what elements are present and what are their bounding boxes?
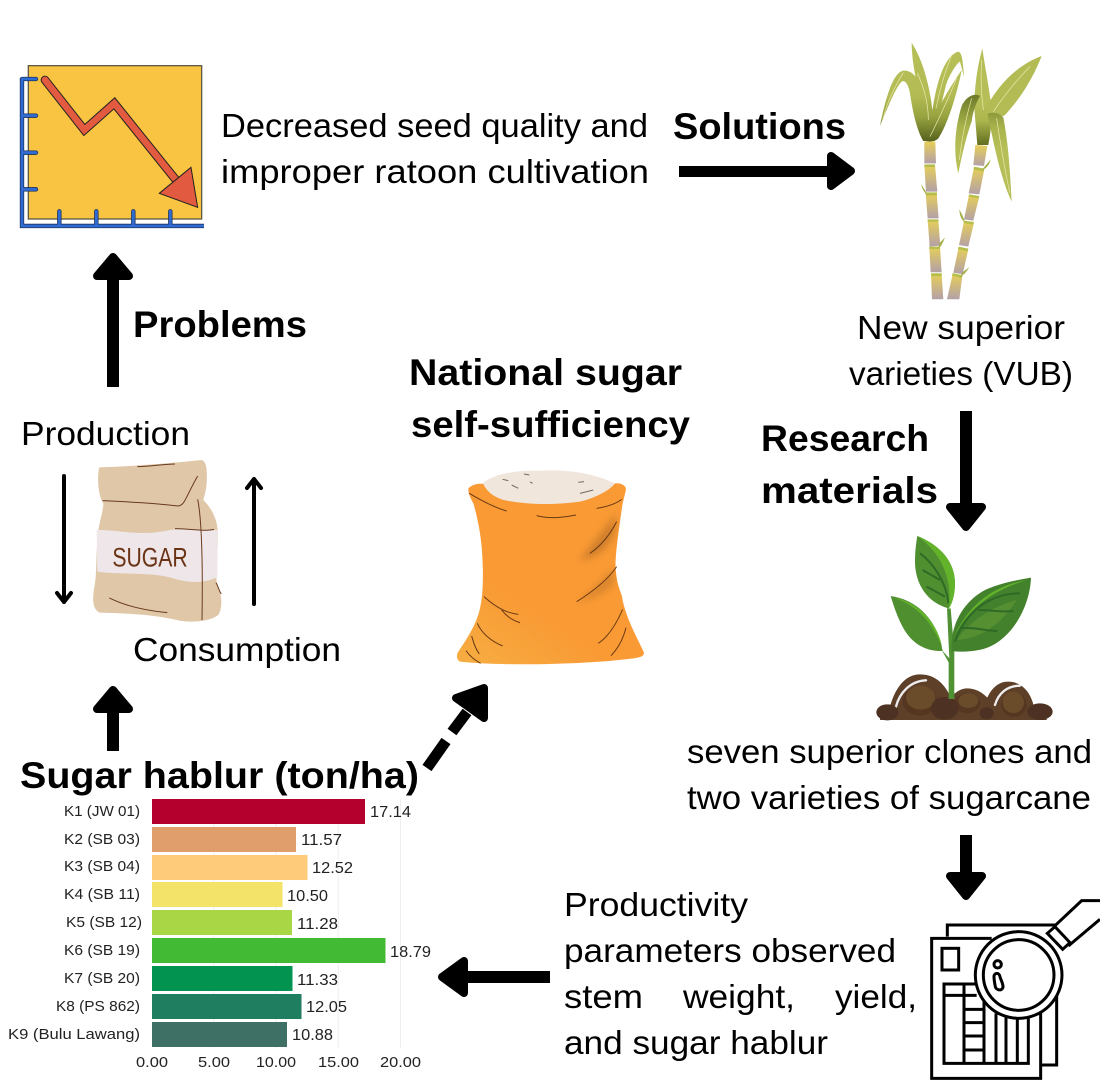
arrow: solutions to cane [679, 156, 851, 186]
bar K9: 10.88 [292, 1027, 333, 1044]
text: decreased seed quality: improper ratoon cultivation [221, 153, 649, 190]
heading: solutions: Solutions [673, 106, 846, 147]
bar K1: K1 (JW 01) [64, 803, 140, 820]
arrow: parameters to chart [442, 961, 550, 993]
heading: national sugar self-sufficiency: self-sufficiency [411, 404, 690, 445]
heading: research materials [761, 418, 938, 511]
heading: national sugar self-sufficiency [409, 352, 690, 445]
icon: declining chart [22, 66, 204, 226]
text: consumption: Consumption [133, 631, 341, 668]
x axis labels: 20.00 [380, 1054, 421, 1071]
bar K1: 17.14 [370, 804, 411, 821]
icon: sugarcane [880, 43, 1042, 299]
bar K5 [66, 910, 338, 935]
bar K9: K9 (Bulu Lawang) [8, 1026, 140, 1043]
bar K4 [64, 882, 328, 907]
bar K9 [8, 1022, 333, 1047]
bar K6 [64, 938, 431, 963]
bar K5: 11.28 [297, 916, 338, 933]
bar K5: K5 (SB 12) [66, 914, 142, 931]
text: productivity parameters: and sugar hablur [564, 1024, 828, 1061]
x axis labels: 15.00 [318, 1054, 359, 1071]
text: new superior varieties [849, 309, 1073, 392]
x axis labels [136, 1054, 421, 1071]
bar K3 [64, 855, 353, 880]
text: productivity parameters: parameters observed [564, 932, 896, 969]
icon: document with magnifier [932, 901, 1100, 1078]
arrow: research materials down [950, 411, 982, 527]
text: production: Production [21, 415, 190, 452]
bar K8 [56, 994, 347, 1019]
arrow: problems up [97, 257, 129, 387]
heading: sugar hablur: Sugar hablur (ton/ha) [20, 755, 419, 796]
text: productivity parameters: stem [564, 978, 643, 1015]
text: productivity parameters: yield, [835, 978, 917, 1015]
bar K4: 10.50 [287, 888, 328, 905]
icon: sugar bag: SUGAR [112, 543, 188, 573]
text: seven superior clones: two varieties of sugarcane [687, 779, 1091, 816]
bar K1 [64, 799, 411, 824]
bar K2: 11.57 [301, 832, 342, 849]
arrow: consumption up [247, 479, 261, 604]
bar K2: K2 (SB 03) [64, 831, 140, 848]
bar K8: K8 (PS 862) [56, 998, 140, 1015]
bar K6: K6 (SB 19) [64, 942, 140, 959]
bar K2 [64, 827, 342, 852]
bar K3: 12.52 [312, 860, 353, 877]
heading: research materials: Research [761, 418, 929, 459]
bar K7 [64, 966, 338, 991]
icon: sugar bag [93, 460, 221, 622]
text: productivity parameters: weight, [682, 978, 795, 1015]
bar chart: sugar hablur [8, 799, 431, 1071]
text: seven superior clones [687, 733, 1092, 816]
arrow: dashed to national sugar [427, 688, 484, 768]
text: new superior varieties: New superior [857, 309, 1065, 346]
icon: orange sack [457, 470, 644, 664]
bar K7: 11.33 [297, 972, 338, 989]
bar K3: K3 (SB 04) [64, 858, 140, 875]
heading: research materials: materials [761, 470, 938, 511]
text: productivity parameters [564, 886, 917, 1061]
x axis labels: 5.00 [198, 1054, 230, 1071]
heading: national sugar self-sufficiency: National sugar [409, 352, 682, 393]
bar K6: 18.79 [390, 944, 431, 961]
text: productivity parameters: Productivity [564, 886, 749, 923]
bar K8: 12.05 [306, 999, 347, 1016]
bar K7: K7 (SB 20) [64, 970, 140, 987]
x axis labels: 10.00 [256, 1054, 296, 1071]
arrow: production down [57, 476, 71, 602]
bar K4: K4 (SB 11) [64, 886, 140, 903]
text: decreased seed quality: Decreased seed quality and [221, 107, 648, 144]
x axis labels: 0.00 [136, 1054, 168, 1071]
arrow: clones to parameters [950, 835, 982, 896]
icon: seedling [876, 536, 1053, 720]
text: new superior varieties: varieties (VUB) [849, 355, 1073, 392]
heading: problems: Problems [133, 304, 307, 345]
text: decreased seed quality [221, 107, 649, 190]
text: seven superior clones: seven superior clones and [687, 733, 1092, 770]
arrow: hablur to bag [97, 690, 129, 751]
